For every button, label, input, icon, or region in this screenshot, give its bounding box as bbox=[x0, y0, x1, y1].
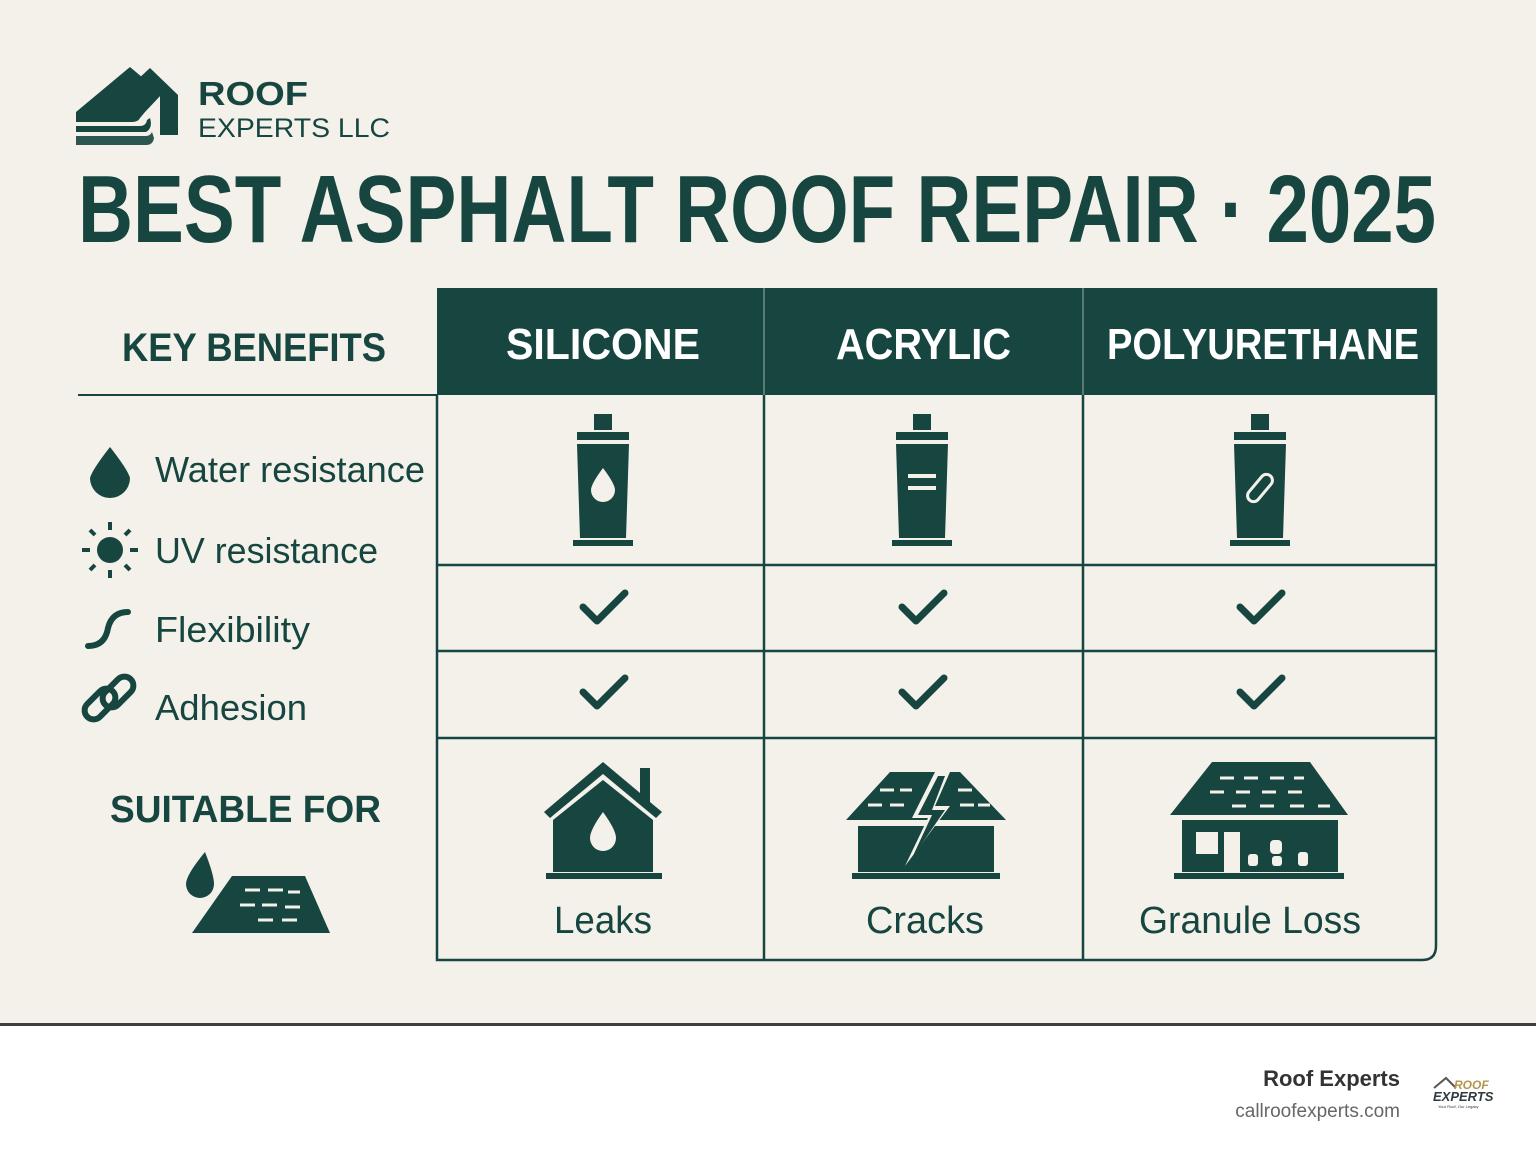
suitable labels: Granule Loss bbox=[1139, 900, 1361, 942]
logo: EXPERTS LLC bbox=[198, 113, 390, 143]
table bbox=[437, 288, 1436, 960]
icons: houses bbox=[544, 762, 1348, 879]
icon: roof with drop bbox=[186, 852, 330, 933]
table: POLYURETHANE bbox=[1107, 320, 1419, 369]
footer bbox=[0, 1023, 1536, 1154]
footer logo: Your Roof, Our Legacy bbox=[1438, 1104, 1479, 1109]
left column labels: Water resistance bbox=[155, 449, 425, 490]
icon: link bbox=[81, 673, 137, 723]
icon: flex bbox=[88, 612, 128, 646]
logo bbox=[76, 67, 390, 145]
suitable labels: Cracks bbox=[866, 900, 984, 942]
footer: callroofexperts.com bbox=[1235, 1101, 1400, 1122]
left column labels bbox=[78, 326, 438, 933]
table: ACRYLIC bbox=[836, 320, 1011, 369]
logo: ROOF bbox=[198, 75, 308, 112]
checkmarks bbox=[583, 593, 1282, 706]
left column labels: Flexibility bbox=[155, 609, 310, 650]
table: SILICONE bbox=[506, 320, 700, 369]
footer: Roof Experts bbox=[1263, 1066, 1400, 1091]
icon: sun bbox=[82, 522, 138, 578]
left column labels: KEY BENEFITS bbox=[122, 326, 386, 370]
left column labels: Adhesion bbox=[155, 687, 307, 728]
suitable labels: Leaks bbox=[554, 900, 652, 942]
footer logo: ROOF bbox=[1454, 1078, 1489, 1092]
suitable labels bbox=[554, 900, 1361, 942]
footer logo bbox=[1433, 1078, 1494, 1109]
left column labels: SUITABLE FOR bbox=[110, 789, 381, 831]
icon: water drop bbox=[90, 447, 130, 498]
left column labels: UV resistance bbox=[155, 530, 378, 571]
icons: tubes bbox=[573, 414, 1290, 546]
footer logo: EXPERTS bbox=[1433, 1089, 1494, 1104]
